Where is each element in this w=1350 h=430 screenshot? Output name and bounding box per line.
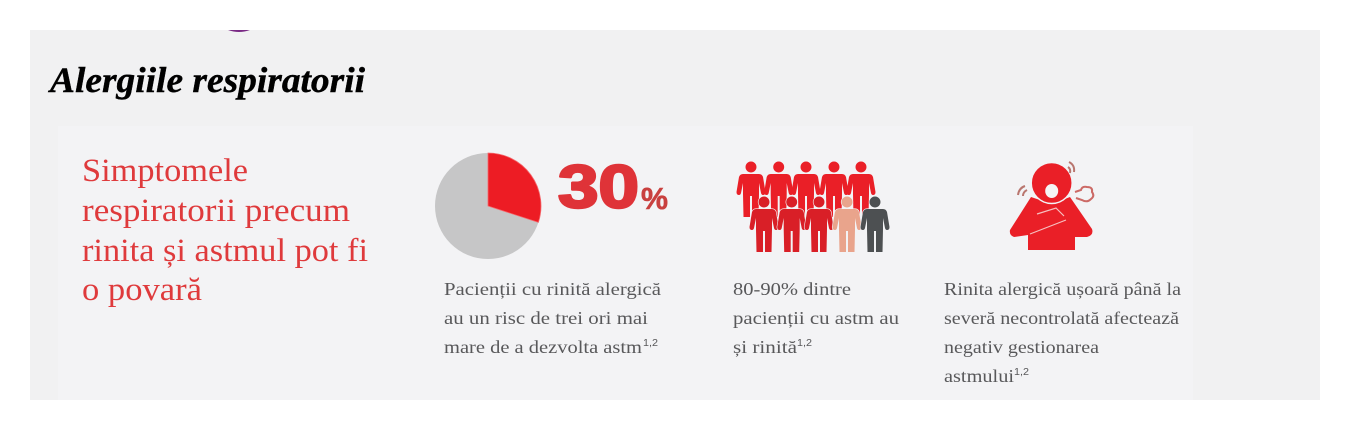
text: uncontrolled rhinitis [944, 279, 1181, 386]
text: rhinitis risk: 1,2 [643, 338, 658, 349]
pie chart: 30 percent [435, 153, 541, 259]
text: asthma patients with rhinitis: 80-90% dintre [733, 279, 851, 299]
purple arc fragment [228, 30, 250, 32]
heading: respiratory symptoms: o povară [82, 272, 202, 308]
text: asthma patients with rhinitis [733, 279, 899, 357]
text: uncontrolled rhinitis: astmului [944, 366, 1014, 386]
heading: respiratory symptoms: rinita și astmul pot fi [82, 233, 368, 269]
text: uncontrolled rhinitis: 1,2 [1014, 367, 1029, 378]
icon: person coughing [1010, 162, 1093, 250]
statistic: 30% [558, 154, 668, 220]
heading: respiratory symptoms [82, 153, 368, 308]
title: Alergiile respiratorii [48, 60, 365, 100]
panel: inner infographic background [58, 126, 1193, 400]
text: uncontrolled rhinitis: severă necontrolată afectează [944, 308, 1179, 328]
text: asthma patients with rhinitis: și rinită [733, 337, 797, 357]
statistic: 30%: 30 [558, 154, 639, 220]
text: rhinitis risk: au un risc de trei ori mai [444, 308, 648, 328]
text: asthma patients with rhinitis: 1,2 [797, 338, 812, 349]
heading: respiratory symptoms: respiratorii precum [82, 193, 350, 229]
text: uncontrolled rhinitis: Rinita alergică ușoară până la [944, 279, 1181, 299]
text: uncontrolled rhinitis: negativ gestionarea [944, 337, 1099, 357]
text: rhinitis risk [444, 279, 661, 357]
statistic: 30%: % [641, 181, 668, 216]
text: rhinitis risk: mare de a dezvolta astm [444, 337, 642, 357]
text: rhinitis risk: Pacienții cu rinită alergică [444, 279, 661, 299]
icon: group of people [736, 162, 890, 252]
text: asthma patients with rhinitis: pacienții cu astm au [733, 308, 899, 328]
heading: respiratory symptoms: Simptomele [82, 153, 248, 189]
